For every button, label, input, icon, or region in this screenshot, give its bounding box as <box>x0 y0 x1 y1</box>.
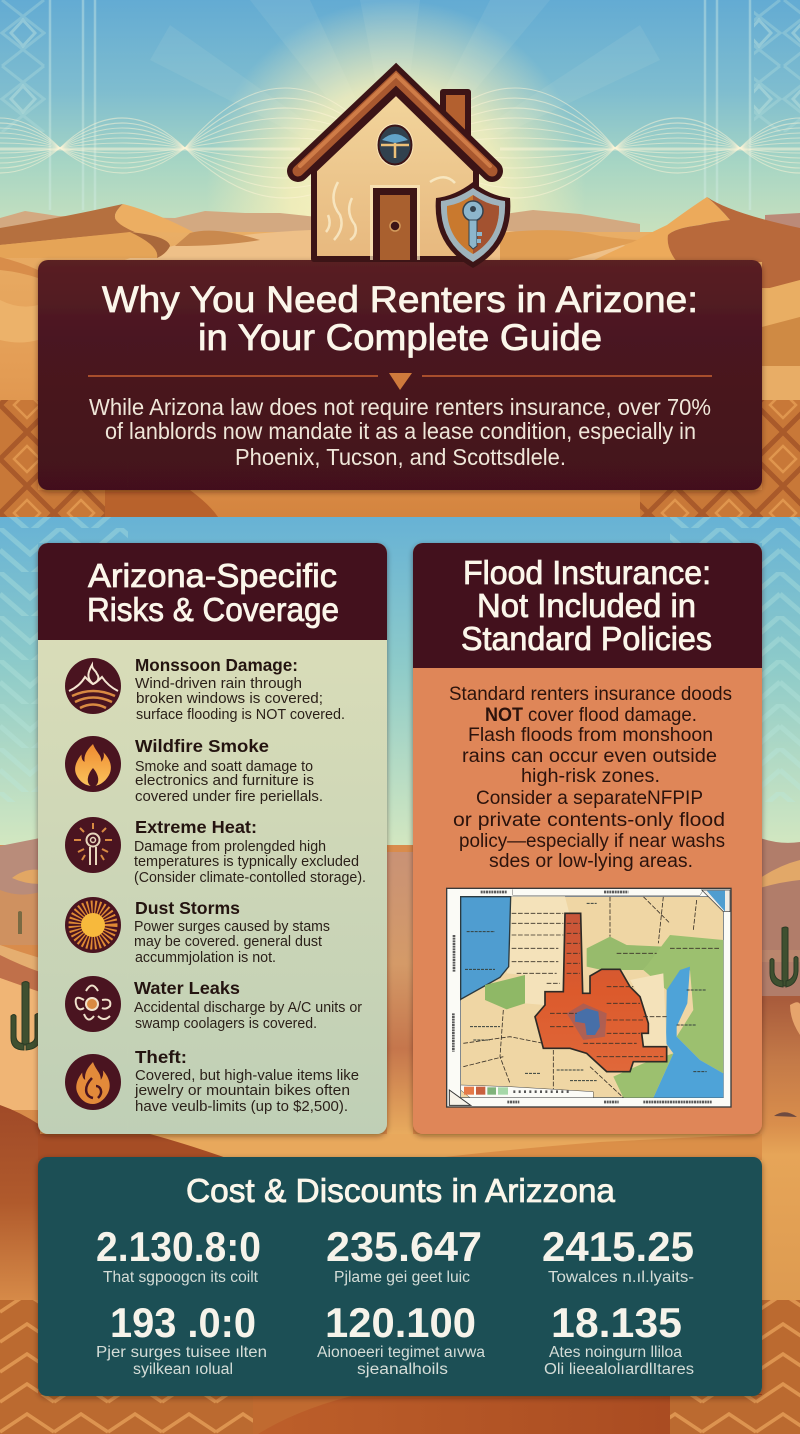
stat 3: 2415.25 <box>542 1223 694 1270</box>
icon: theft <box>65 1054 121 1110</box>
text: wildfire smoke: Wildfire Smoke <box>135 736 269 756</box>
stat 1: That sgpoogcn its coilt <box>103 1269 259 1286</box>
lower tribal borders <box>0 400 800 517</box>
text: water leaks: Water Leaks <box>134 978 240 998</box>
text: extreme heat: (Consider climate-contolled storage). <box>134 869 366 886</box>
text: wildfire smoke: Smoke and soatt damage to <box>135 758 313 775</box>
panel heading: Not Included in <box>477 587 696 624</box>
left dune <box>0 204 135 245</box>
door <box>370 185 420 260</box>
intro text <box>89 394 711 470</box>
map legend <box>461 1085 593 1098</box>
text: dust storms: Power surges caused by stams <box>134 918 330 935</box>
middle gap and bottom band <box>387 852 413 1152</box>
right dune <box>500 230 640 262</box>
stat 5: Aionoeeri tegimet aıvwa <box>317 1344 485 1361</box>
panel heading: Standard Policies <box>461 620 712 657</box>
flood text: high-risk zones. <box>521 766 660 787</box>
text: wildfire smoke <box>135 736 323 805</box>
stat 6: 18.135 <box>551 1299 682 1346</box>
side lattice borders <box>0 0 800 210</box>
text: theft <box>134 1047 359 1115</box>
stat 4: Pjer surges tuisee ılten <box>96 1344 267 1361</box>
icon: extreme heat <box>65 817 121 873</box>
intro text: Phoenix, Tucson, and Scottsdlele. <box>235 444 566 470</box>
wall swirl marks <box>326 177 455 240</box>
stat 6 <box>544 1299 694 1378</box>
text: theft: Covered, but high-value items like <box>135 1067 359 1084</box>
stat 5 <box>317 1299 485 1378</box>
text: theft: Theft: <box>135 1047 187 1067</box>
text: water leaks <box>134 978 362 1032</box>
title: Why You Need Renters in Arizone: <box>102 279 698 320</box>
text: dust storms: accummjolation is not. <box>135 949 276 966</box>
map margin labels <box>453 892 712 1102</box>
flood text: Standard renters insurance doods <box>449 684 732 705</box>
flood text: Consider a separateNFPIP <box>476 788 703 809</box>
text: extreme heat: Extreme Heat: <box>135 817 257 837</box>
text: wildfire smoke: covered under fire periellals. <box>135 788 323 805</box>
far mountains <box>0 210 640 262</box>
stat 6: Oli lieealolıardlItares <box>544 1361 694 1378</box>
stat 5: 120.100 <box>325 1299 476 1346</box>
header panel <box>38 260 762 490</box>
icon: wildfire <box>65 736 121 792</box>
text: water leaks: Accidental discharge by A/C units or <box>134 999 362 1016</box>
panel heading: Arizona-Specific <box>88 557 337 594</box>
title: in Your Complete Guide <box>198 317 602 358</box>
text: monsoon damage: broken windows is covered; <box>136 690 323 707</box>
stat 4: 193 .0:0 <box>110 1299 256 1346</box>
panel heading: Cost & Discounts in Arizzona <box>186 1172 616 1209</box>
text: dust storms: Dust Storms <box>135 898 240 918</box>
intro text: While Arizona law does not require renters insurance, over 70% <box>89 394 711 420</box>
stat 1: 2.130.8:0 <box>96 1223 261 1270</box>
icon: dust storms <box>65 897 121 953</box>
stat 4 <box>96 1299 267 1378</box>
intro text: of lanblords now mandate it as a lease condition, especially in <box>105 418 696 444</box>
stat 2: 235.647 <box>326 1223 482 1270</box>
flood map <box>447 888 731 1107</box>
left margin dunes <box>0 838 40 945</box>
text: dust storms: may be covered. general dust <box>134 933 323 950</box>
panel heading <box>87 557 339 628</box>
icon: monsoon <box>65 658 121 714</box>
map lines <box>463 897 720 1098</box>
panel: cost and discounts <box>38 1157 762 1396</box>
text: dust storms <box>134 898 330 966</box>
stat 5: sjeanalhoils <box>357 1361 448 1378</box>
bottom tribal floor <box>0 1390 800 1434</box>
flood text: rains can occur even outside <box>462 746 717 767</box>
key <box>463 201 483 249</box>
background: lower desert scene <box>0 517 800 1434</box>
flood text <box>449 684 732 872</box>
roof <box>298 75 492 171</box>
shield with key <box>436 182 510 268</box>
panel: Arizona-specific risks <box>38 543 387 1134</box>
divider with triangle <box>88 373 712 390</box>
text: monsoon damage: Monssoon Damage: <box>135 655 298 675</box>
wave lines <box>0 88 800 198</box>
text: wildfire smoke: electronics and furniture is <box>135 772 314 789</box>
cacti <box>11 911 798 1050</box>
text: water leaks: swamp coolagers is covered. <box>135 1015 317 1032</box>
panel: flood insurance <box>413 543 762 1134</box>
flood text: NOT <box>485 705 523 726</box>
flood text: or private contents-only flood <box>453 810 725 831</box>
stat 3: Towalces n.ıl.lyaits- <box>548 1269 694 1286</box>
icon: water leaks <box>65 976 121 1032</box>
round window <box>376 124 414 166</box>
title <box>102 279 698 358</box>
flood text: cover flood damage. <box>528 705 697 726</box>
text: monsoon damage: Wind-driven rain through <box>135 675 302 692</box>
flood text: policy—especially if near washs <box>459 831 725 852</box>
sun rays <box>150 0 660 185</box>
text: extreme heat <box>134 817 366 886</box>
flood text: Flash floods from monshoon <box>468 725 713 746</box>
text: extreme heat: Damage from prolengded high <box>134 838 326 855</box>
panel heading <box>461 554 712 657</box>
text: monsoon damage <box>135 655 345 723</box>
stat 4: syilkean ıolual <box>133 1361 233 1378</box>
text: monsoon damage: surface flooding is NOT covered. <box>136 706 345 723</box>
stat 6: Ates noingurn lliloa <box>549 1344 682 1361</box>
right margin dunes <box>760 838 800 1000</box>
house walls <box>314 92 476 259</box>
panel heading: Risks & Coverage <box>87 591 339 628</box>
hero illustration: house with shield and key <box>298 75 510 268</box>
chimney <box>443 92 468 136</box>
text: theft: jewelry or mountain bikes often <box>134 1082 350 1099</box>
background: upper desert scene <box>0 0 800 517</box>
text: theft: have veulb-limits (up to $2,500). <box>135 1098 348 1115</box>
chevron borders <box>0 517 800 802</box>
flood text: sdes or low-lying areas. <box>489 851 693 872</box>
text: extreme heat: temperatures is typnically excluded <box>134 853 359 870</box>
stat 2: Pjlame gei geet luic <box>334 1269 470 1286</box>
panel heading: Flood Insturance: <box>463 554 711 591</box>
